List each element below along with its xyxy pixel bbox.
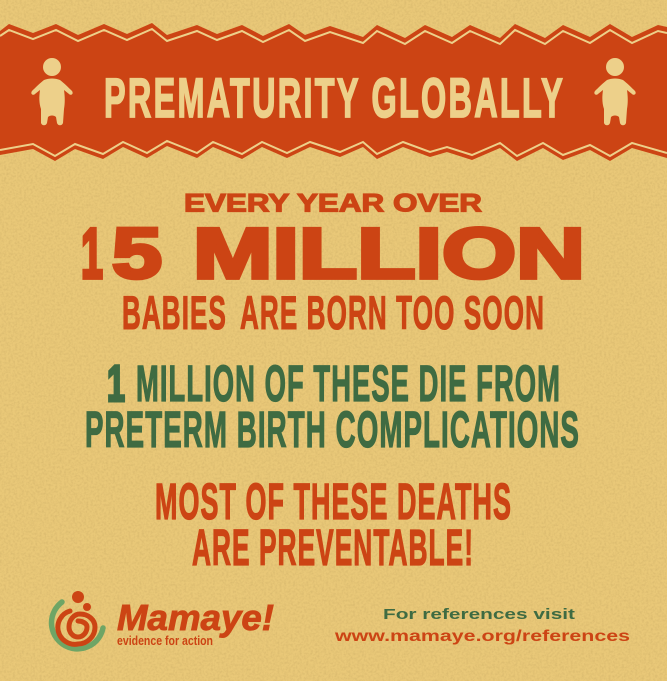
digit 1: 1 [81,215,103,294]
logo wordmark: Mamaye! [117,597,274,638]
word babies: BABIES [122,286,227,339]
icon: baby left [31,58,73,125]
headline: every year over: EVERY YEAR OVER [184,190,482,218]
banner [0,23,667,161]
icon: baby right [594,58,636,125]
logo: Mamaye [52,591,274,649]
headline: babies are born too soon [122,286,545,339]
digit 5: 5 [112,215,162,294]
references url: www.mamaye.org/references [334,628,630,645]
headline: 15 million [81,215,585,294]
statistic: 1 million die [85,355,580,458]
logo icon: spiral [52,591,103,649]
references note [334,606,630,645]
word million: MILLION [193,215,585,294]
references label: For references visit [383,606,575,623]
bottom cream zigzag line [0,141,667,156]
statement: preventable deaths [155,473,512,576]
banner ribbon [0,23,667,161]
top cream zigzag line [0,29,667,44]
logo tagline: evidence for action [117,633,213,648]
numeral one: 1 [107,355,125,412]
